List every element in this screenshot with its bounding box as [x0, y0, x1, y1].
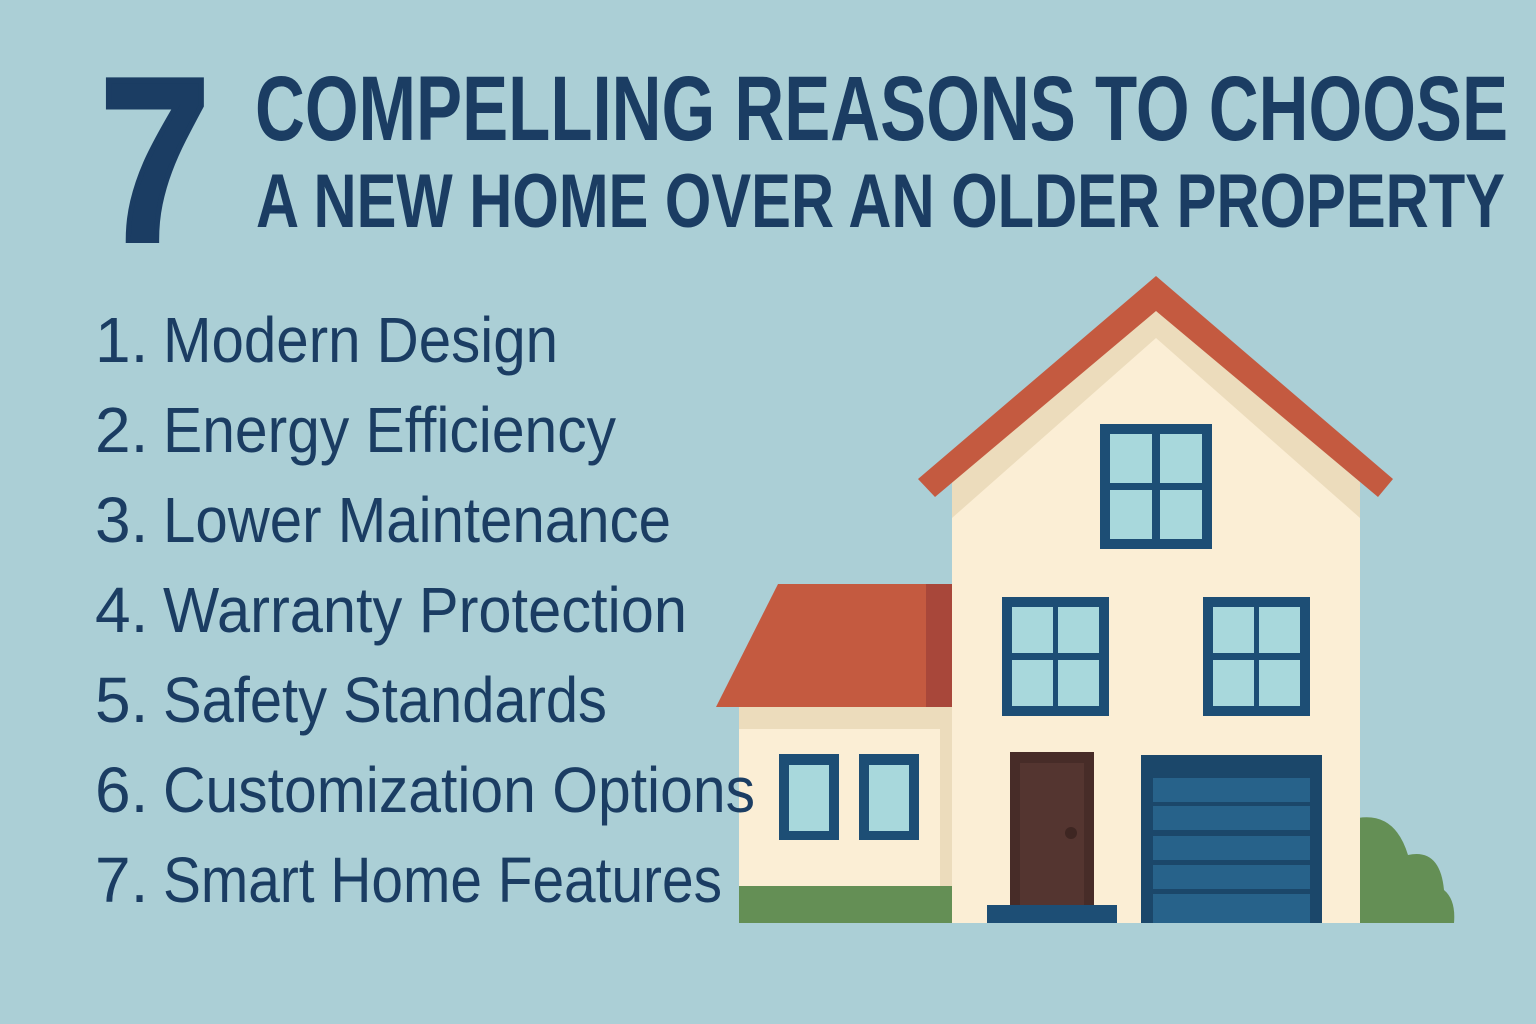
list of reasons: Smart Home Features [163, 844, 722, 916]
main roof [918, 276, 1393, 497]
list of reasons: Safety Standards [163, 664, 607, 736]
main wall [952, 309, 1360, 923]
house illustration [716, 276, 1454, 923]
bush [1358, 817, 1454, 923]
wing windows [779, 754, 919, 840]
top window [1100, 424, 1212, 549]
list of reasons: 3. [95, 484, 148, 556]
side wing wall [739, 707, 952, 923]
title [255, 58, 1508, 244]
list of reasons: 7. [95, 844, 148, 916]
title number 7: 7 [100, 31, 210, 290]
list of reasons: Modern Design [163, 304, 558, 376]
list of reasons: 1. [95, 304, 148, 376]
side wing roof [716, 584, 952, 707]
list of reasons: Warranty Protection [163, 574, 687, 646]
garage [1141, 755, 1322, 923]
list of reasons: 2. [95, 394, 148, 466]
door [987, 752, 1117, 923]
list of reasons: Customization Options [163, 754, 755, 826]
list of reasons: 5. [95, 664, 148, 736]
list of reasons [95, 304, 755, 916]
list of reasons: 4. [95, 574, 148, 646]
middle windows [1002, 597, 1310, 716]
list of reasons: Energy Efficiency [163, 394, 616, 466]
list of reasons: Lower Maintenance [163, 484, 671, 556]
list of reasons: 6. [95, 754, 148, 826]
